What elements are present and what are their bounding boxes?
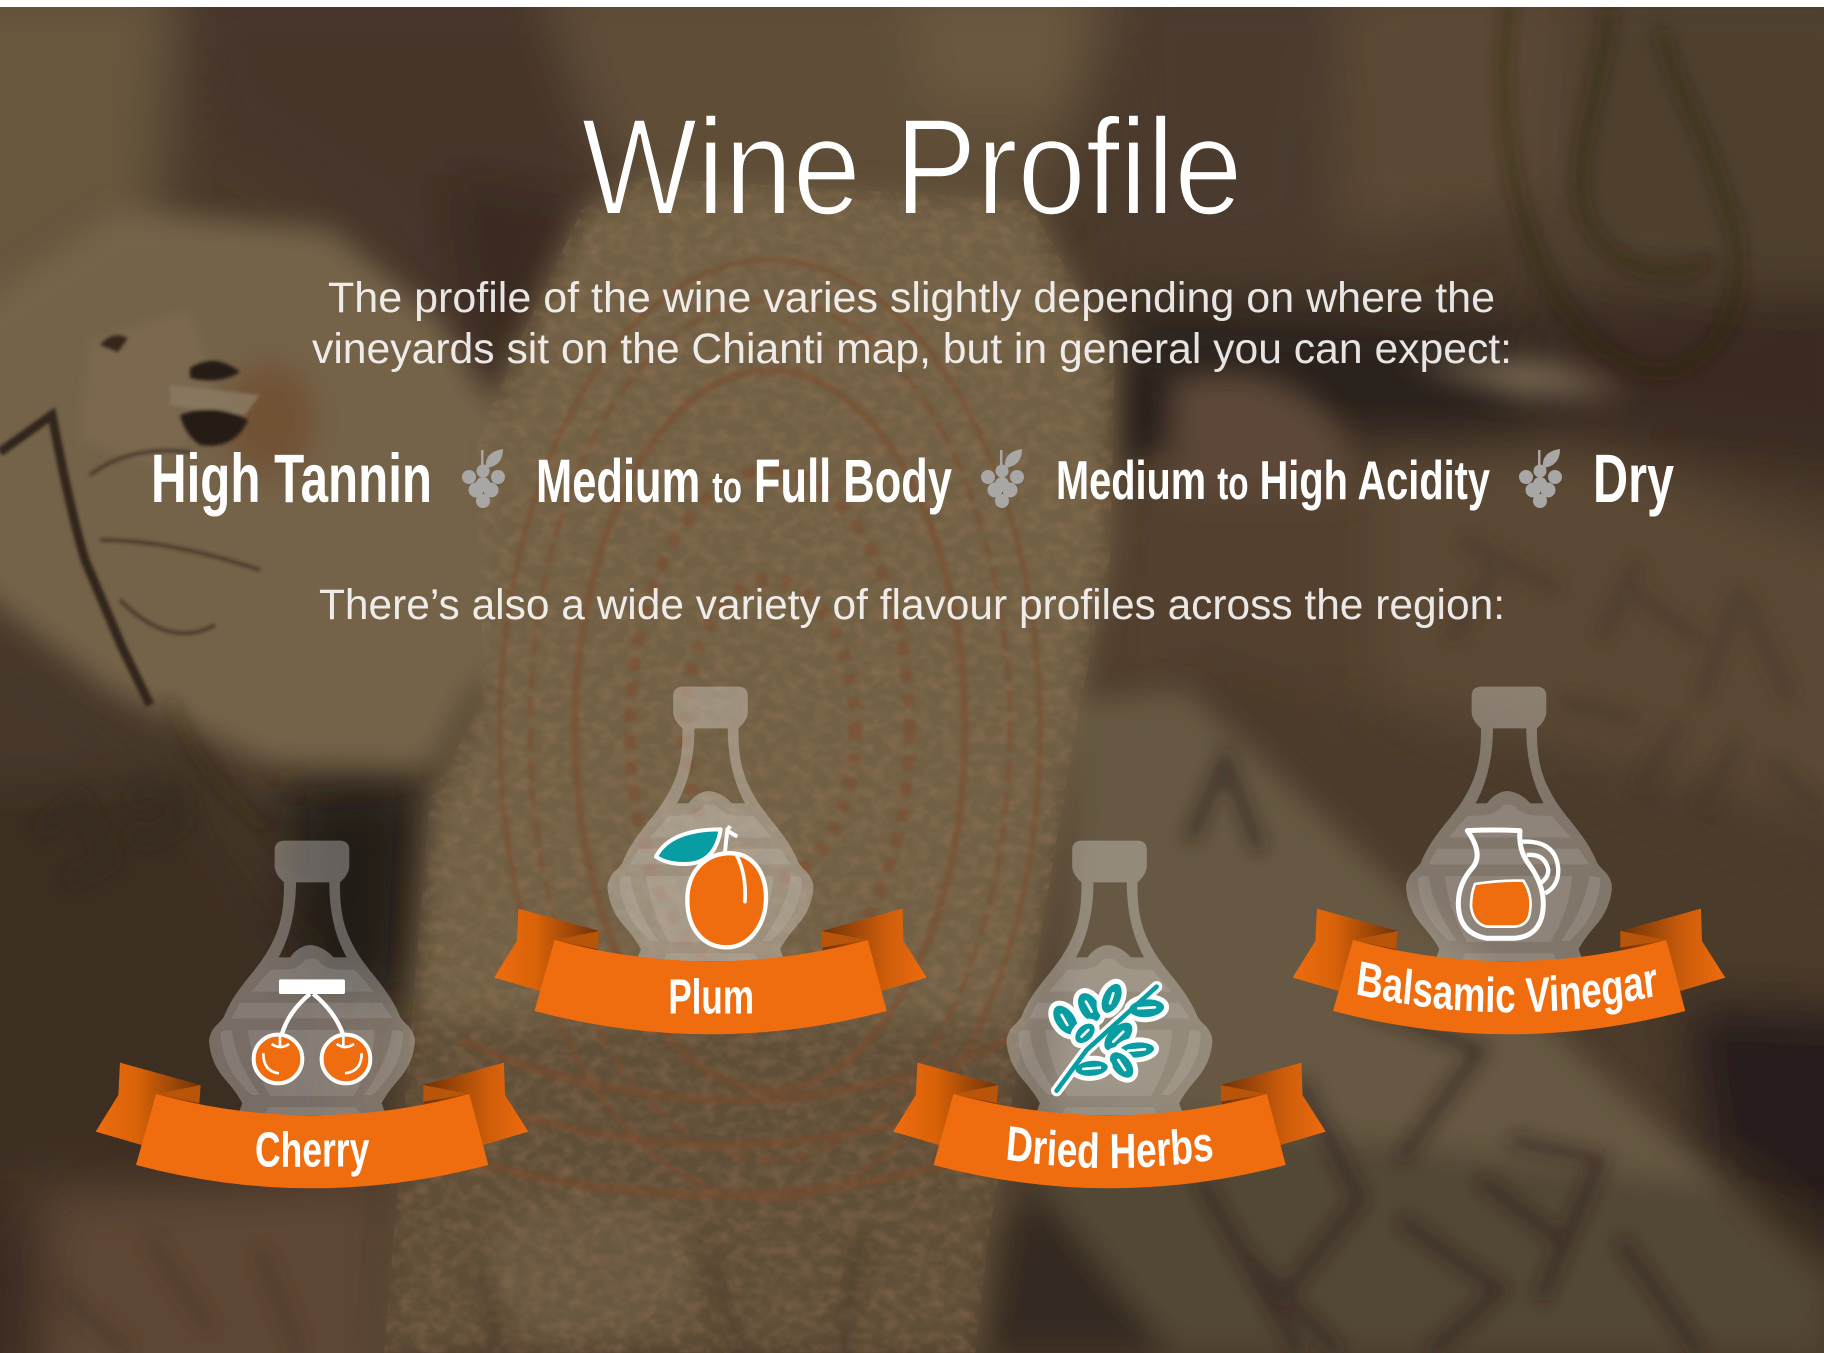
bottle: Plum: [607, 687, 813, 961]
bottle: Cherry: [209, 841, 415, 1115]
flavour badge: Dried Herbs: [893, 840, 1326, 1188]
label: Balsamic Vinegar: Balsamic Vinegar: [1357, 961, 1656, 1014]
title: Wine Profile: [582, 91, 1242, 244]
icon: herb sprig: [1045, 977, 1168, 1091]
attribute: High Tannin: High Tannin: [151, 440, 432, 517]
icon: grapes 2: [981, 449, 1024, 508]
label: Plum: Plum: [668, 970, 754, 1024]
label: Cherry: Cherry: [255, 1124, 369, 1178]
flavour badge: Cherry: [96, 841, 528, 1188]
intro paragraph: [312, 274, 1512, 373]
ribbon: Balsamic Vinegar: [1293, 909, 1725, 1034]
ribbon: Plum: [494, 909, 927, 1034]
intro paragraph: The profile of the wine varies slightly depending on where the: [328, 274, 1495, 322]
icon: grapes 1: [462, 449, 505, 508]
ribbon: Cherry: [96, 1063, 528, 1188]
cork grain: [380, 170, 1120, 1353]
bottle: Dried Herbs: [1006, 841, 1212, 1115]
icon: plum: [656, 826, 766, 947]
attribute: Dry: Dry: [1593, 440, 1674, 517]
label: Dried Herbs: Dried Herbs: [1008, 1126, 1212, 1168]
flavour badge: Balsamic Vinegar: [1292, 686, 1726, 1034]
flavour badge: Plum: [494, 687, 927, 1034]
label: Dried Herbs: [1008, 1126, 1212, 1168]
intro paragraph: vineyards sit on the Chianti map, but in general you can expect:: [312, 325, 1512, 373]
bottle: Balsamic Vinegar: [1406, 687, 1612, 961]
icon: jug: [1458, 830, 1558, 938]
flavour intro text: There’s also a wide variety of flavour profiles across the region:: [319, 581, 1505, 629]
icon: grapes 3: [1519, 449, 1562, 508]
attribute: Medium to Full Body: Medium to Full Body: [536, 447, 952, 515]
icon: cherries: [254, 979, 370, 1083]
attribute: Medium to High Acidity: Medium to High Acidity: [1056, 449, 1490, 511]
ribbon: Dried Herbs: [893, 1063, 1326, 1188]
